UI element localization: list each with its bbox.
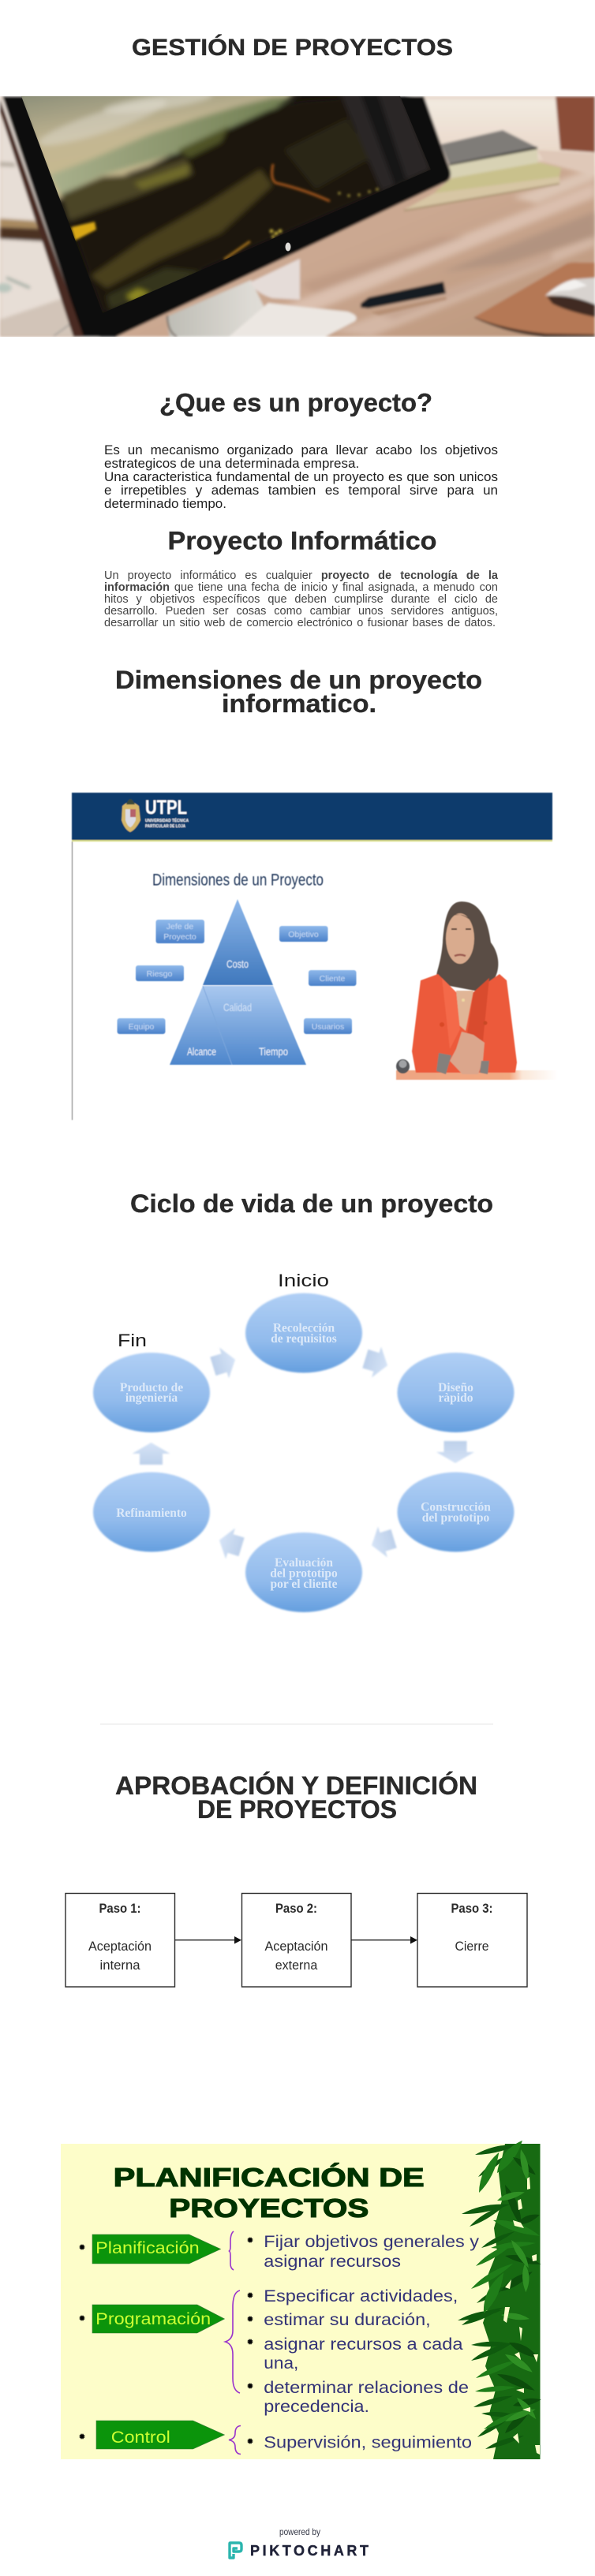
text block: que es un proyecto (104, 442, 498, 511)
planning title: PLANIFICACIÓN DE (114, 2163, 425, 2192)
cycle labels: del prototipo (270, 1566, 338, 1581)
dimension buttons: Jefe de (167, 922, 193, 931)
text block: que es un proyecto: determinado tiempo. (104, 496, 226, 511)
slide header band (72, 793, 552, 840)
leather mouse pad (474, 263, 595, 334)
cycle labels: Refinamiento (116, 1506, 187, 1520)
pyramid: Costo (226, 958, 249, 970)
pyramid: Calidad (223, 1001, 252, 1014)
step 1: Aceptación (88, 1939, 152, 1954)
black pen (361, 282, 446, 308)
text block: que es un proyecto: Una caracteristica fundamental de un proyecto es que son unicos (104, 469, 498, 484)
planning items: determinar relaciones de (264, 2379, 469, 2397)
planning title (114, 2163, 425, 2223)
monitor bezel (2, 96, 451, 337)
text block: proyecto informatico: información que tiene una fecha de inicio y final asignada, a menudo con (104, 581, 498, 593)
heading: proyecto informatico: Proyecto Informático (167, 527, 437, 555)
text block: que es un proyecto: estrategicos de una determinada empresa. (104, 456, 359, 471)
text block: proyecto informatico (104, 569, 499, 629)
pyramid: Alcance (187, 1045, 216, 1058)
dimension buttons: Objetivo (288, 930, 319, 939)
planning items: precedencia. (264, 2398, 369, 2416)
step 3: Paso 3: (451, 1902, 492, 1916)
slide title: Dimensiones de un Proyecto (152, 871, 324, 890)
left bullets: ✹ (78, 2313, 86, 2324)
pentagon: planificacion (92, 2234, 221, 2264)
planning items: Especificar actividades, (264, 2287, 458, 2305)
cycle ellipses (93, 1294, 515, 1612)
planning items: asignar recursos a cada (264, 2335, 463, 2354)
right bullets: ✹ (246, 2436, 254, 2447)
text block: proyecto informatico: hitos y objetivos específicos que deben cumplirse durante el ciclo de (104, 593, 498, 606)
hero photo: monitor on a wooden desk (0, 88, 595, 337)
planning items: asignar recursos (264, 2253, 401, 2271)
title: GESTIÓN DE PROYECTOS (132, 34, 453, 61)
step 2: Paso 2: (275, 1902, 317, 1916)
text block: que es un proyecto: Es un mecanismo organizado para llevar acabo los objetivos (104, 442, 498, 457)
arrow 1 to 2 (175, 1936, 241, 1943)
heading: dimensiones: Dimensiones de un proyecto (115, 666, 482, 694)
purple braces (226, 2231, 241, 2455)
left bullets: ✹ (78, 2432, 86, 2442)
planning items: estimar su duración, (264, 2311, 431, 2329)
dimension buttons: Proyecto (163, 932, 196, 942)
planning items: Fijar objetivos generales y (264, 2233, 480, 2251)
red mug (538, 96, 595, 169)
pentagon: planificacion: Planificación (95, 2239, 200, 2257)
text block: proyecto informatico: Un proyecto informático es cualquier proyecto de tecnología de la (104, 569, 498, 582)
right bullets: ✹ (246, 2337, 254, 2347)
planning items (264, 2233, 480, 2451)
cycle labels: Construcción (421, 1500, 491, 1514)
right bullets: ✹ (246, 2235, 254, 2246)
pentagon: programacion: Programación (95, 2310, 211, 2328)
heading: aprobacion y definicion (115, 1771, 477, 1824)
cycle labels (116, 1322, 491, 1591)
cycle diagram (93, 1271, 515, 1612)
text block: proyecto informatico: desarrollo. Pueden ser cosas como cambiar unos servidores antiguos, (104, 604, 498, 617)
monitor screen with landscape (16, 88, 431, 313)
footer: powered by piktochart: powered by (279, 2526, 320, 2537)
step 2: externa (275, 1958, 318, 1973)
right bullets: ✹ (246, 2290, 254, 2301)
UTPL logo: UNIVERSIDAD TÉCNICA (145, 817, 189, 823)
cycle labels: ingeniería (125, 1391, 178, 1405)
blurred background at left (0, 96, 99, 337)
pyramid (170, 899, 306, 1065)
blurred background at upper right (410, 96, 595, 181)
right bullets (246, 2235, 254, 2447)
right bullets: ✹ (246, 2314, 254, 2324)
pentagon: programacion (92, 2305, 224, 2333)
footer: powered by piktochart (230, 2526, 369, 2559)
monitor stand (54, 259, 357, 337)
cycle labels: Producto de (120, 1381, 183, 1394)
planning items: Supervisión, seguimiento (264, 2434, 472, 2451)
cycle labels: Recolección (273, 1322, 335, 1335)
label: fin: Fin (118, 1331, 147, 1350)
heading: aprobacion y definicion: APROBACIÓN Y DEFINICIÓN (115, 1771, 477, 1800)
pentagon: control: Control (111, 2429, 170, 2447)
arrow 2 to 3 (351, 1936, 417, 1943)
label: inicio: Inicio (278, 1271, 329, 1290)
left bullets (78, 2242, 86, 2442)
heading: que es un proyecto: ¿Que es un proyecto? (159, 388, 432, 416)
dimension buttons: Riesgo (147, 969, 173, 979)
approval process flow (65, 1893, 527, 1987)
dimension buttons (117, 920, 357, 1034)
heading: aprobacion y definicion: DE PROYECTOS (197, 1795, 397, 1824)
cycle labels: Diseño (438, 1381, 473, 1394)
planning slide (61, 2137, 542, 2459)
cycle labels: de requisitos (271, 1332, 337, 1346)
step 1: interna (99, 1958, 140, 1973)
dimension buttons: Usuarios (312, 1022, 344, 1032)
stack of books (404, 130, 561, 211)
UTPL logo (122, 797, 189, 832)
text block: que es un proyecto: e irrepetibles y ademas tambien es temporal sirve para un (104, 483, 498, 498)
wood grain (287, 172, 595, 336)
heading: ciclo de vida: Ciclo de vida de un proyecto (130, 1189, 493, 1218)
pyramid: Tiempo (259, 1045, 288, 1058)
cycle labels: del prototipo (422, 1511, 489, 1525)
heading: dimensiones (115, 666, 482, 718)
step 1 (65, 1893, 175, 1987)
planning items: una, (264, 2354, 298, 2373)
UTPL logo: UTPL (145, 797, 187, 819)
dimension buttons: Cliente (320, 974, 346, 984)
step 3 (417, 1893, 527, 1987)
step 3: Cierre (455, 1939, 489, 1954)
step 2: Aceptación (265, 1939, 328, 1954)
footer: powered by piktochart: PIKTOCHART (250, 2543, 369, 2559)
step 2 (241, 1893, 351, 1987)
UTPL logo: PARTICULAR DE LOJA (145, 824, 185, 829)
text block: proyecto informatico: desarrollar un sitio web de comercio electrónico o fusionar bases de datos. (104, 617, 496, 629)
pentagon: control (96, 2421, 224, 2449)
slide screenshot: dimensiones de un proyecto (72, 793, 558, 1120)
right bullets: ✹ (246, 2381, 254, 2391)
apple logo (286, 243, 290, 251)
dimension buttons: Equipo (129, 1022, 155, 1032)
heading: dimensiones: informatico. (222, 689, 376, 718)
white mouse (545, 278, 595, 317)
planning title: PROYECTOS (169, 2193, 369, 2223)
presenter (396, 902, 558, 1080)
cycle labels: Evaluación (275, 1556, 333, 1570)
cycle labels: por el cliente (271, 1577, 338, 1591)
desk wood surface (0, 96, 595, 337)
cycle labels: ràpido (439, 1391, 473, 1405)
piktochart logo mark (230, 2543, 241, 2558)
bamboo leaves (457, 2137, 542, 2459)
left bullets: ✹ (78, 2242, 86, 2253)
step 1: Paso 1: (99, 1902, 140, 1916)
cycle arrows (133, 1343, 474, 1562)
